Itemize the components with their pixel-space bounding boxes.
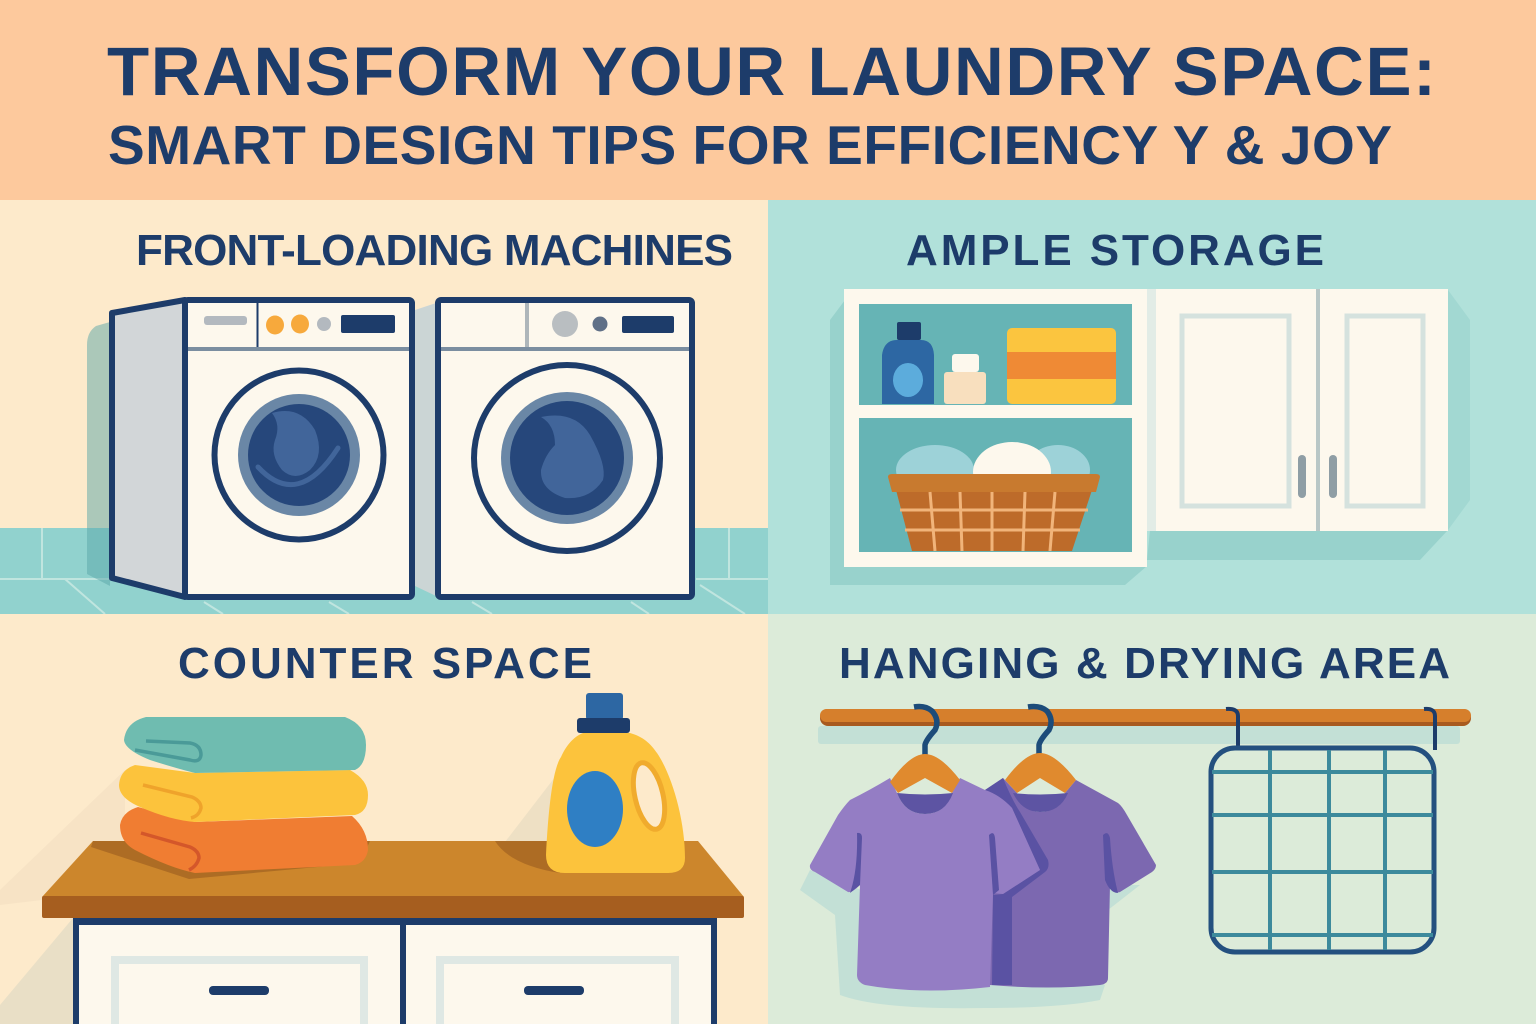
back shirt bbox=[985, 706, 1156, 988]
icon: cream bottle bbox=[944, 354, 986, 404]
title: TRANSFORM YOUR LAUNDRY SPACE: bbox=[107, 33, 1436, 110]
washer bbox=[112, 300, 412, 597]
open shelf unit bbox=[844, 289, 1448, 567]
icon: laundry basket bbox=[888, 442, 1100, 551]
panel: counter space bbox=[0, 614, 768, 1024]
header banner bbox=[0, 0, 1536, 200]
counter and cabinets bbox=[42, 841, 744, 1024]
panel: front-loading machines bbox=[0, 200, 768, 614]
icon: stacked towels bbox=[119, 717, 368, 873]
heading: FRONT-LOADING MACHINES bbox=[136, 226, 733, 275]
drying rack bbox=[1211, 709, 1435, 952]
heading: HANGING & DRYING AREA bbox=[839, 639, 1450, 688]
dryer bbox=[415, 300, 692, 597]
panel: hanging and drying area bbox=[768, 614, 1536, 1024]
heading: COUNTER SPACE bbox=[178, 639, 592, 688]
front shirt bbox=[810, 706, 1040, 991]
icon: folded towels bbox=[1007, 328, 1116, 404]
heading: AMPLE STORAGE bbox=[906, 226, 1324, 275]
subtitle: SMART DESIGN TIPS FOR EFFICIENCY Y & JOY bbox=[108, 114, 1392, 176]
icon: detergent jug bbox=[546, 693, 685, 873]
panel: ample storage bbox=[768, 200, 1536, 614]
hanging rod bbox=[820, 709, 1471, 726]
cabinet doors bbox=[1147, 289, 1448, 531]
icon: blue bottle bbox=[882, 322, 934, 404]
